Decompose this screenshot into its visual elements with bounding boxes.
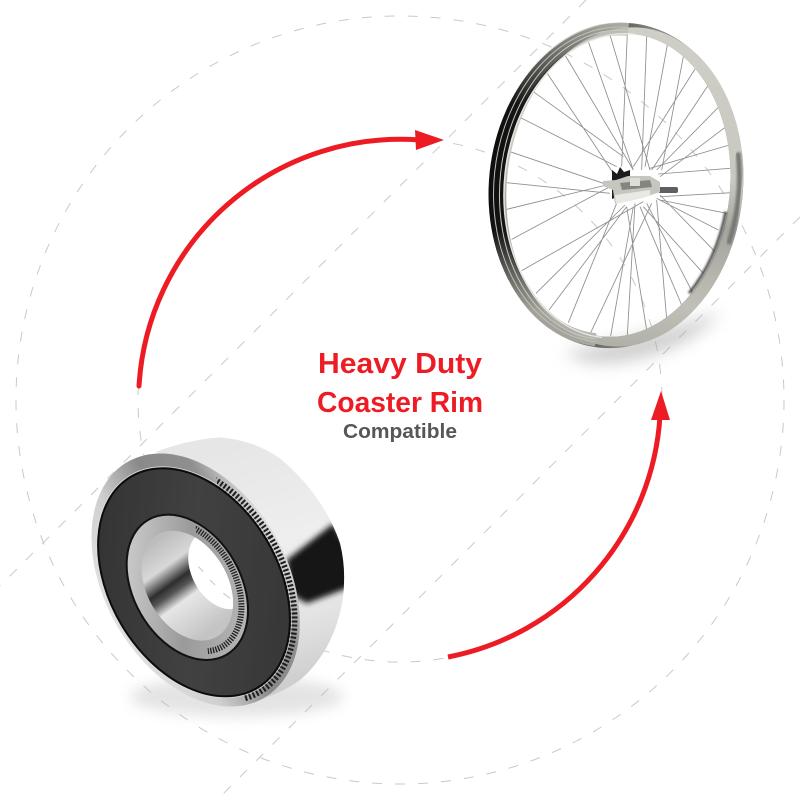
bore interior [123,514,252,657]
outer face ring [49,416,343,744]
spokes [506,33,732,336]
dark reflection band on cylinder [285,520,344,608]
streaked inner band [196,526,244,654]
subheading: Compatible: Compatible [343,421,457,443]
bearing shadow [130,677,343,717]
heading: Heavy Duty: Heavy Duty [318,348,482,380]
heading: Coaster Rim: Coaster Rim [317,387,483,419]
red arrow: wheel to bearing [448,391,670,657]
inner race ring [102,493,273,682]
bore opening [188,538,233,610]
sealed ball bearing [92,438,344,720]
wheel shadow [565,312,720,363]
rim [473,10,759,361]
center caption [317,348,483,443]
red arrow: bearing to wheel [139,130,444,386]
rubber seal [59,434,329,731]
knurled band [216,477,298,701]
bicycle wheel [473,10,759,363]
hub and axle [603,167,678,204]
bearing outer cylinder [157,437,344,705]
